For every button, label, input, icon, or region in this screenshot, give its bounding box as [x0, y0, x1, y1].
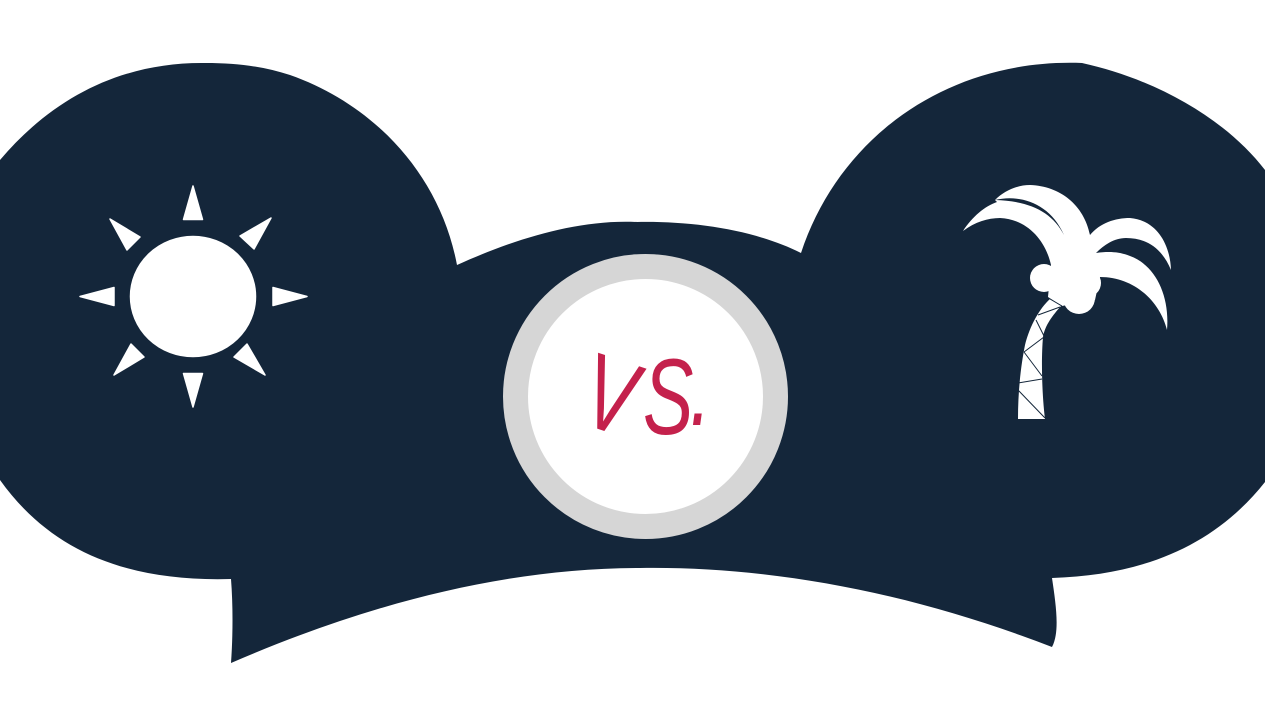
vs label: VS.: [576, 328, 711, 464]
icon: sun: [80, 186, 307, 407]
badge ring: [516, 266, 776, 526]
coconuts: [1030, 264, 1058, 292]
vs badge: [516, 266, 776, 526]
palm fronds: [963, 185, 1171, 330]
trunk lines: [1018, 299, 1062, 418]
sun rays: [80, 186, 307, 407]
sun disc: [130, 236, 256, 356]
frond slit: [995, 198, 1064, 235]
palm trunk: [1018, 299, 1061, 419]
icon: palm tree: [963, 185, 1171, 419]
